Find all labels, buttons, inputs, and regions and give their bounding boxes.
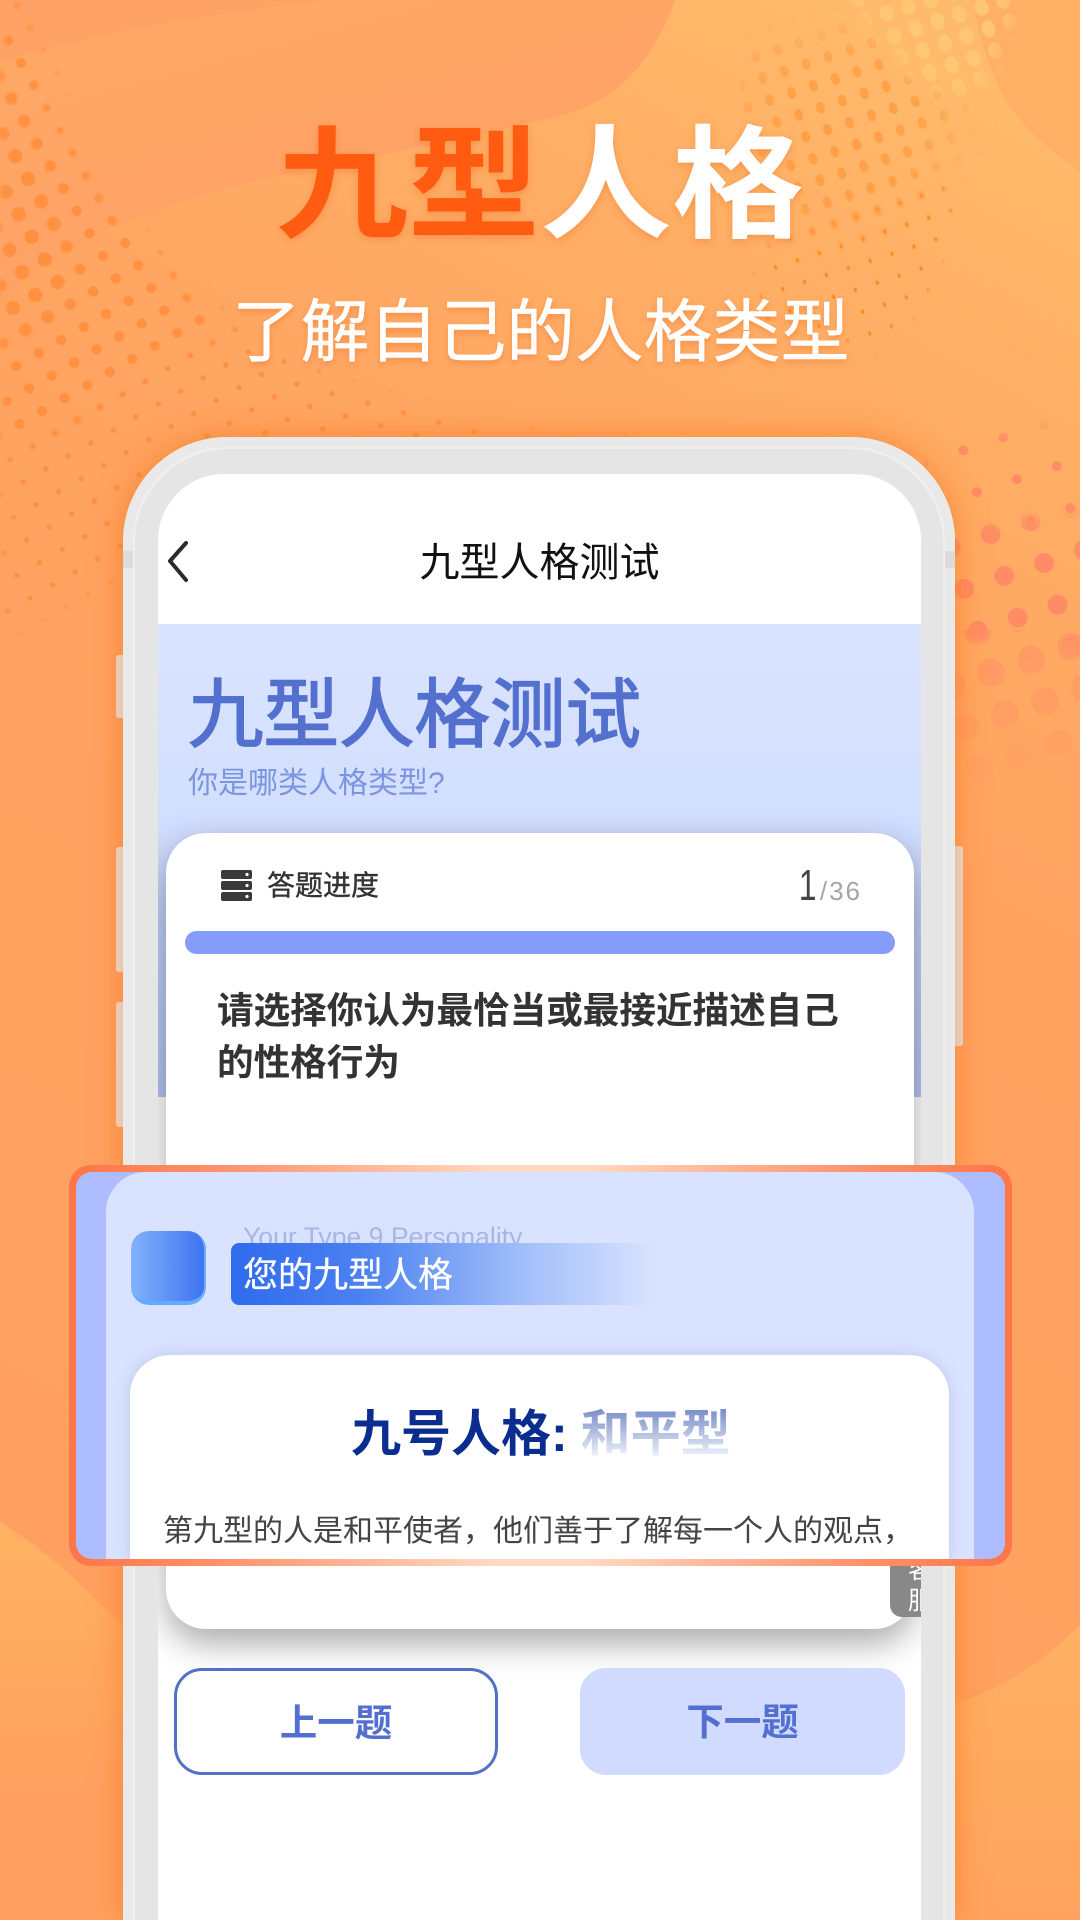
- result heading: 九号人格: 和平型: [351, 1406, 731, 1462]
- progress count: 1: [799, 861, 817, 910]
- bottom-left wave: [0, 1522, 125, 1920]
- icon tile: [131, 1231, 206, 1305]
- screen: [158, 474, 921, 1920]
- english label: Your Type 9 Personality: [243, 1222, 522, 1252]
- top-right wave: [973, 0, 1080, 172]
- question text: [217, 990, 839, 1083]
- result body text: 第九型的人是和平使者，他们善于了解每一个人的观点，: [163, 1515, 913, 1548]
- back arrow: [168, 540, 188, 582]
- result popup with gradient frame: [69, 1165, 1012, 1566]
- question text: 的性格行为: [217, 1042, 400, 1083]
- header banner: [158, 624, 921, 1097]
- question card: [166, 833, 914, 1629]
- top-left sliver: [0, 0, 330, 62]
- icon: progress stack: [221, 870, 252, 901]
- progress count: [799, 861, 862, 910]
- section bar: [231, 1243, 656, 1305]
- banner subtitle: 你是哪类人格类型?: [188, 767, 445, 800]
- next button: [580, 1668, 905, 1775]
- nav title: 九型人格测试: [420, 541, 660, 585]
- bottom-right wave: [950, 1625, 1080, 1920]
- progress count: /36: [820, 876, 862, 906]
- inner panel: [106, 1172, 974, 1559]
- halftone dots right: [925, 424, 1080, 717]
- title: 九型人格: [276, 87, 804, 264]
- next button: 下一题: [686, 1701, 799, 1743]
- halftone dots left: [0, 2, 628, 636]
- subtitle: 了解自己的人格类型: [232, 276, 849, 376]
- progress bar: [185, 931, 895, 954]
- section title: 您的九型人格: [243, 1256, 453, 1295]
- banner title: 九型人格测试: [188, 673, 641, 757]
- phone body: [123, 437, 955, 1920]
- halftone dots top-right: [740, 0, 1014, 356]
- previous button: [174, 1668, 498, 1775]
- top-left wave: [0, 0, 675, 302]
- customer service tag: [890, 1517, 950, 1617]
- previous button: 上一题: [280, 1702, 392, 1744]
- question text: 请选择你认为最恰当或最接近描述自己: [217, 990, 839, 1031]
- result card: [130, 1355, 949, 1559]
- progress label: 答题进度: [267, 870, 379, 901]
- popup body: [76, 1172, 1005, 1559]
